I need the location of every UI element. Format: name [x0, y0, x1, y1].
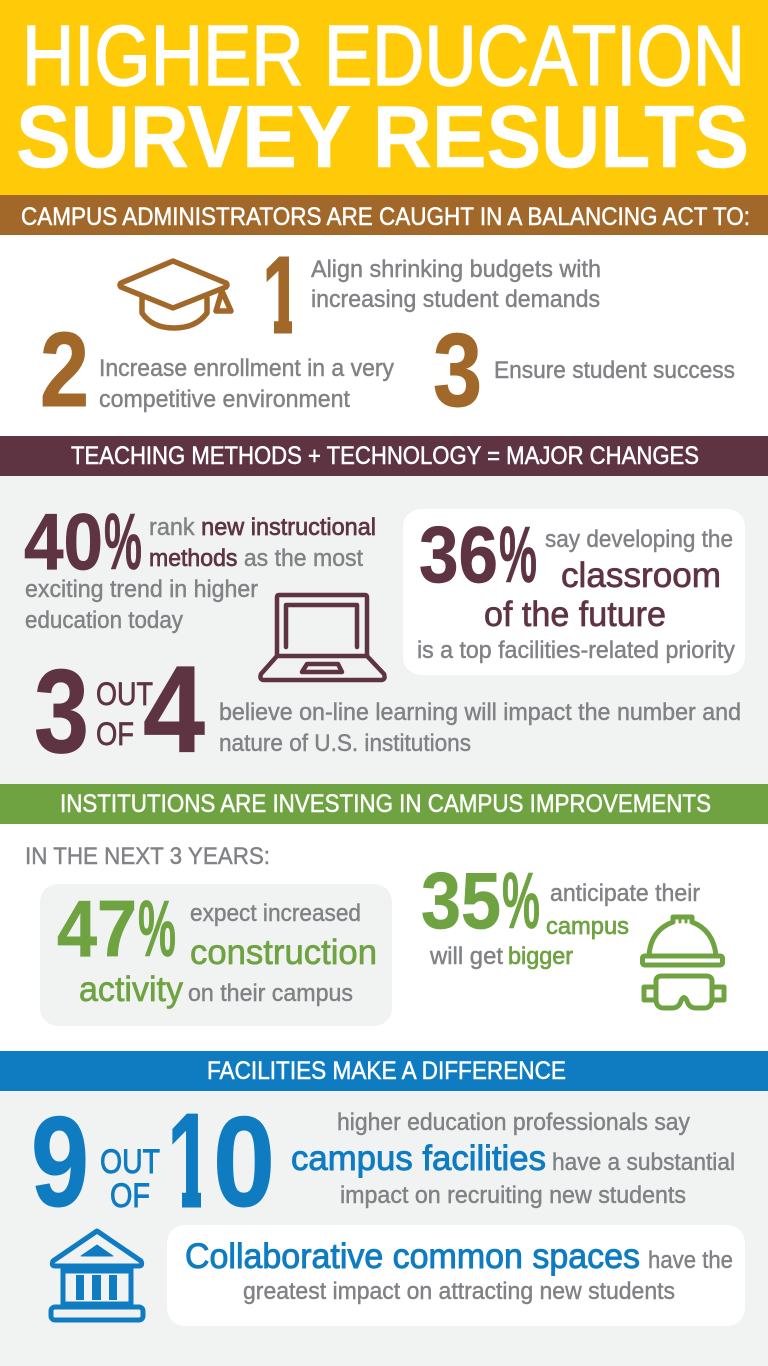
text: in the next 3 years: IN THE NEXT 3 YEARS: — [25, 843, 270, 870]
callout: 36% classroom of the future: 36 — [419, 510, 498, 599]
stat: 9 out of 10: 1 — [167, 1085, 213, 1236]
icon: campus building — [51, 1231, 143, 1320]
number 3: 3 — [433, 313, 482, 429]
text: increase enrollment: Increase enrollment in a very — [99, 355, 394, 382]
stat: 9 out of 10: 9 — [31, 1091, 89, 1234]
stat: 9 out of 10: OF — [110, 1177, 150, 1215]
callout: 36% classroom of the future: is a top facilities-related priority — [417, 637, 735, 664]
stat: 40%: education today — [25, 607, 183, 634]
panel: facilities — [0, 1051, 768, 1366]
header banner — [0, 0, 768, 195]
stat: 40%: % — [104, 497, 142, 586]
stat: 9 out of 10: OUT — [100, 1143, 160, 1181]
heading band: facilities: FACILITIES MAKE A DIFFERENCE — [207, 1057, 566, 1085]
stat: 9 out of 10 — [34, 1114, 271, 1208]
heading band: teaching methods: TEACHING METHODS + TECHNOLOGY = MAJOR CHANGES — [71, 442, 699, 470]
callout: 36% classroom of the future: say developing the — [545, 526, 733, 553]
stat: 3 out of 4: OUT — [96, 676, 153, 712]
callout: 36% classroom of the future: % — [499, 510, 537, 599]
stat: 3 out of 4: 4 — [143, 642, 205, 779]
number 1: 1 — [262, 234, 302, 357]
callout: 47% construction: activity — [79, 970, 183, 1009]
panel: teaching methods — [0, 436, 768, 784]
stat: 3 out of 4: 3 — [34, 645, 89, 778]
callout: collaborative common spaces: Collaborative common spaces — [185, 1237, 640, 1276]
panel: campus improvements — [0, 784, 768, 1051]
heading band: facilities — [0, 1051, 768, 1091]
stat: 40% — [24, 497, 376, 634]
callout: 47% construction: % — [138, 884, 176, 973]
number 2: 2 — [40, 311, 89, 429]
text: campus facilities: higher education professionals say — [337, 1109, 690, 1136]
icon: graduation cap — [120, 261, 231, 328]
panel: balancing act — [0, 195, 768, 436]
stat: 35% — [421, 856, 700, 970]
stat: 40%: methods as the most — [149, 545, 363, 572]
callout: collaborative common spaces: greatest impact on attracting new students — [243, 1278, 675, 1305]
text: campus facilities: campus facilities — [291, 1139, 546, 1178]
heading band: campus improvements: INSTITUTIONS ARE INVESTING IN CAMPUS IMPROVEMENTS — [60, 790, 711, 818]
stat: 40%: rank new instructional — [149, 514, 376, 541]
callout: 36% classroom of the future: classroom — [561, 556, 721, 595]
stat: 3 out of 4: nature of U.S. institutions — [219, 730, 471, 757]
text: student success: Ensure student success — [494, 357, 735, 384]
stat: 3 out of 4: believe on-line learning will impact the number and — [219, 699, 741, 726]
icon: hard hat and goggles — [642, 917, 724, 1008]
text: align budgets: increasing student demands — [311, 286, 600, 313]
text: campus facilities: impact on recruiting new students — [340, 1182, 686, 1209]
stat: 3 out of 4: OF — [96, 716, 134, 752]
callout: 36% classroom of the future — [403, 509, 745, 675]
stat: 35%: % — [502, 856, 540, 945]
text: campus facilities — [291, 1109, 735, 1209]
stat: 40%: 40 — [24, 497, 103, 586]
text: increase enrollment — [99, 355, 394, 413]
callout: 47% construction: 47 — [57, 884, 137, 973]
heading band: balancing act — [0, 195, 768, 235]
stat: 35%: anticipate their — [550, 880, 700, 907]
stat: 35%: campus — [546, 913, 629, 940]
callout: 47% construction — [40, 884, 392, 1026]
stat: 35%: will get — [429, 943, 503, 970]
callout: 47% construction: on their campus — [188, 980, 353, 1007]
text: increase enrollment: competitive environment — [99, 386, 350, 413]
stat: 3 out of 4 — [34, 642, 741, 779]
callout: 47% construction: expect increased — [190, 900, 361, 927]
text: align budgets: Align shrinking budgets with — [311, 256, 601, 283]
text: campus facilities: have a substantial — [552, 1149, 735, 1176]
callout: 47% construction: construction — [190, 933, 377, 972]
stat: 35%: 35 — [421, 856, 501, 945]
stat: 9 out of 10: 0 — [213, 1091, 275, 1234]
stat: 35%: bigger — [508, 943, 573, 970]
callout: collaborative common spaces: have the — [648, 1247, 733, 1274]
text: align budgets — [311, 256, 601, 313]
stat: 40%: exciting trend in higher — [25, 576, 258, 603]
callout: 36% classroom of the future: of the future — [484, 595, 666, 634]
icon: laptop — [260, 595, 385, 680]
heading band: teaching methods — [0, 436, 768, 476]
heading band: campus improvements — [0, 784, 768, 824]
callout: collaborative common spaces — [167, 1225, 745, 1326]
